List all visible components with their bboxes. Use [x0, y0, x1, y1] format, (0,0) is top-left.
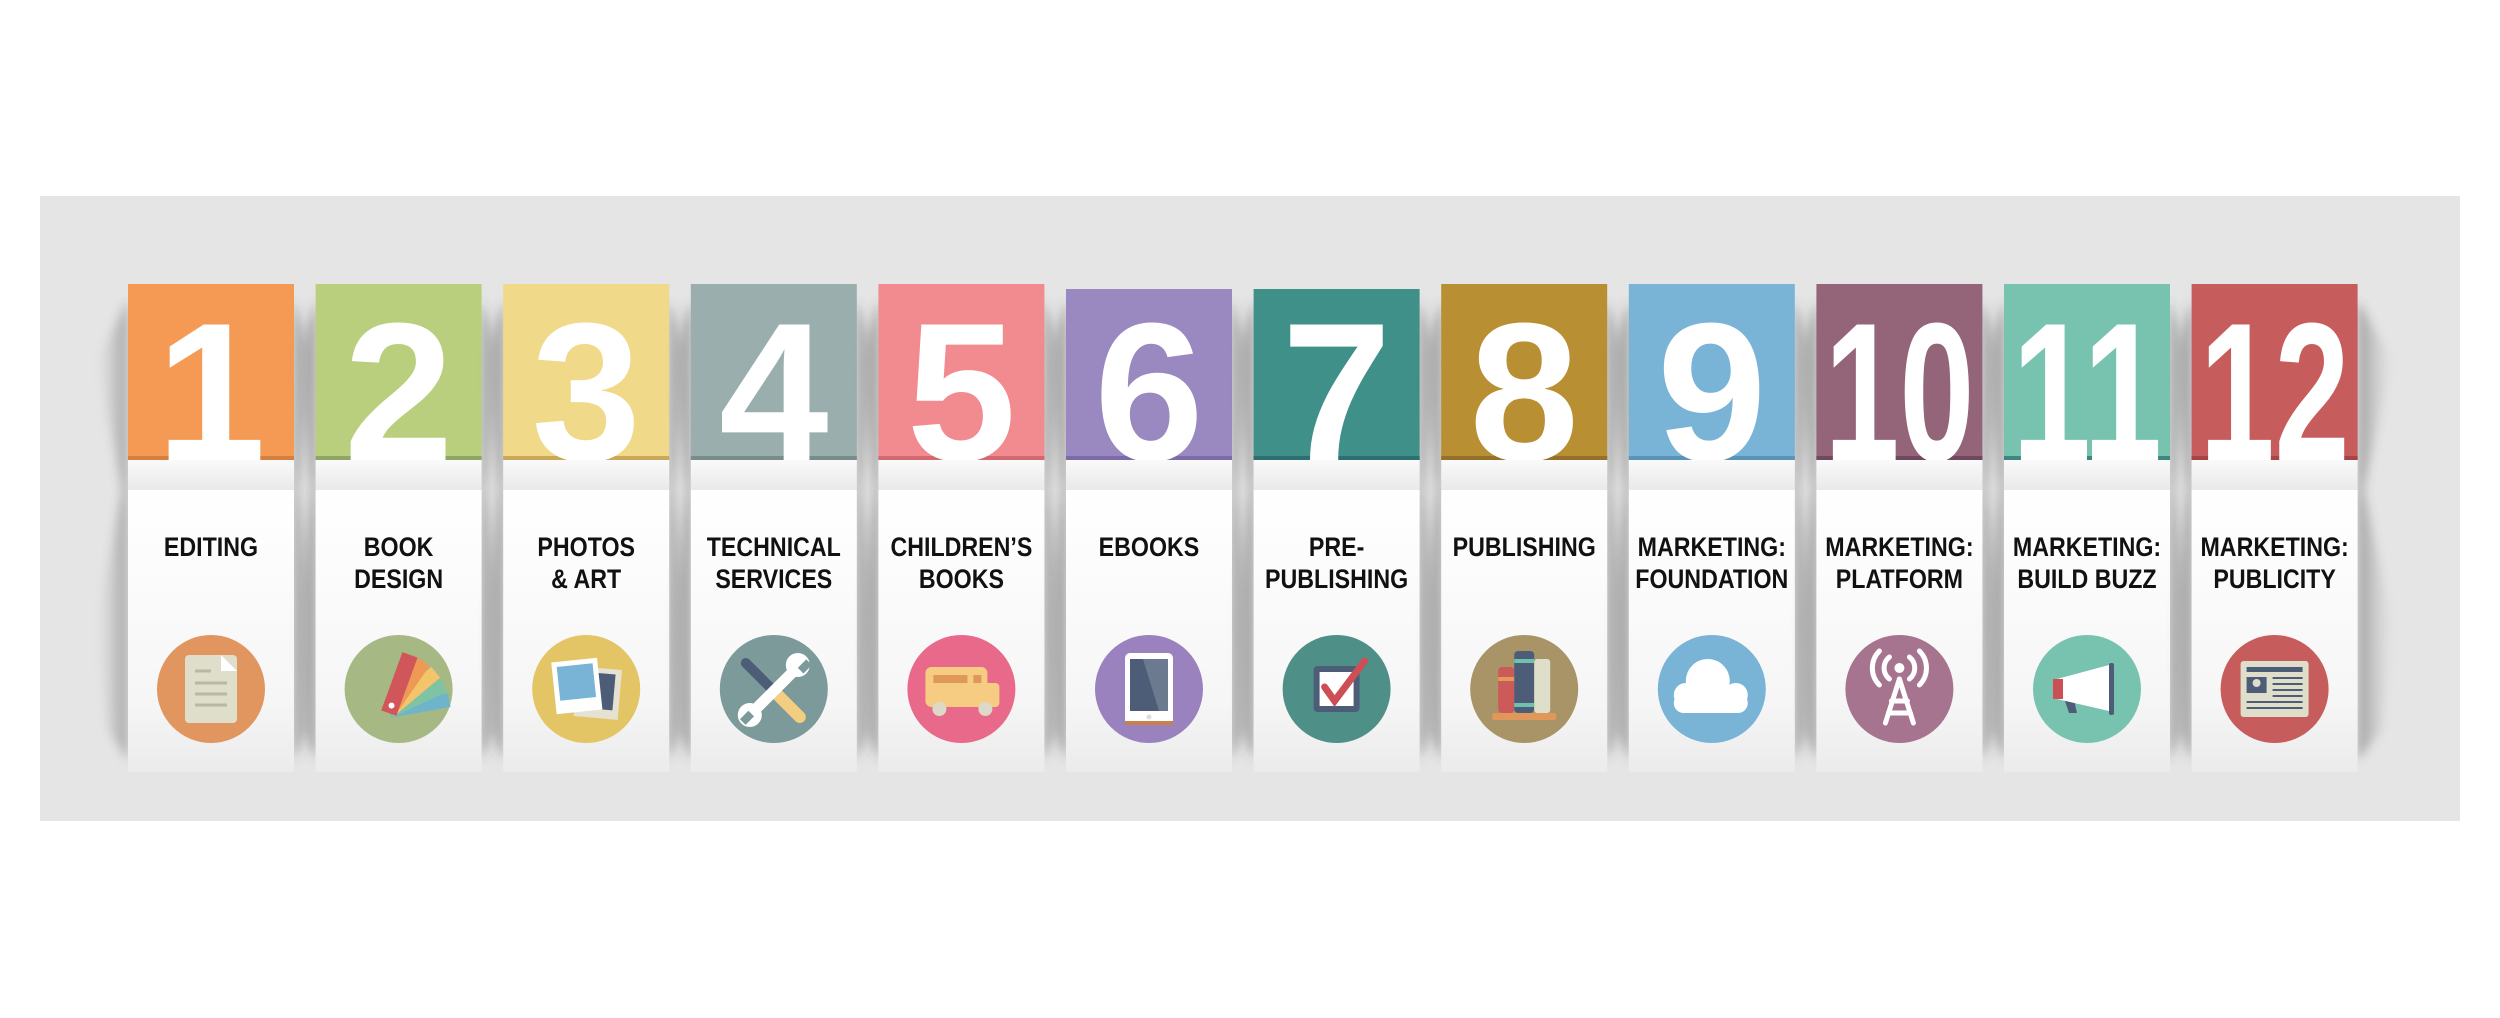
column 2: book design: DESIGN [354, 564, 443, 594]
column 10: marketing platform: MARKETING: [1825, 532, 1974, 562]
column 6: ebooks [1048, 282, 1250, 772]
column 10: marketing platform [1798, 282, 2000, 772]
column 3: photos & art [485, 282, 687, 772]
column 7: pre-publishing: PRE- [1309, 532, 1364, 562]
column 11: marketing build buzz [1986, 282, 2188, 772]
column 12: marketing publicity [2174, 282, 2392, 772]
column 4: technical services [673, 282, 875, 772]
column 6: ebooks: EBOOKS [1099, 532, 1199, 562]
column 12: marketing publicity: PUBLICITY [2213, 564, 2336, 594]
column 3: photos & art: 3 [531, 282, 641, 502]
column 5: children's books: 5 [907, 282, 1016, 502]
column 1: editing: EDITING [164, 532, 258, 562]
column 5: children's books: BOOKS [919, 564, 1004, 594]
column 6: ebooks: 6 [1094, 282, 1204, 502]
background panel [40, 196, 2460, 821]
column 8: publishing: 8 [1469, 282, 1579, 502]
column 4: technical services: 4 [719, 282, 829, 502]
column 10: marketing platform: PLATFORM [1836, 564, 1963, 594]
column 12: marketing publicity: MARKETING: [2200, 532, 2349, 562]
column 7: pre-publishing: PUBLISHING [1265, 564, 1408, 594]
column 11: marketing build buzz: BUILD BUZZ [2017, 564, 2157, 594]
column 4: technical services: SERVICES [715, 564, 832, 594]
column 1: editing [98, 282, 312, 772]
column 2: book design: BOOK [364, 532, 433, 562]
column 8: publishing: PUBLISHING [1453, 532, 1596, 562]
column 4: technical services: TECHNICAL [707, 532, 841, 562]
column 9: marketing foundation: FOUNDATION [1635, 564, 1788, 594]
column 5: children's books: CHILDREN’S [890, 532, 1032, 562]
column 2: book design [298, 282, 500, 772]
column 3: photos & art: PHOTOS [537, 532, 635, 562]
column 3: photos & art: & ART [551, 564, 622, 594]
column 1: editing: 1 [156, 282, 266, 502]
column 8: publishing [1423, 282, 1625, 772]
column 2: book design: 2 [344, 282, 453, 502]
column 9: marketing foundation: 9 [1657, 282, 1767, 502]
column 7: pre-publishing [1236, 282, 1438, 772]
column 11: marketing build buzz: MARKETING: [2013, 532, 2161, 562]
column 9: marketing foundation: MARKETING: [1638, 532, 1786, 562]
column 7: pre-publishing: 7 [1282, 282, 1391, 502]
column 5: children's books [860, 282, 1062, 772]
column 9: marketing foundation [1611, 282, 1813, 772]
